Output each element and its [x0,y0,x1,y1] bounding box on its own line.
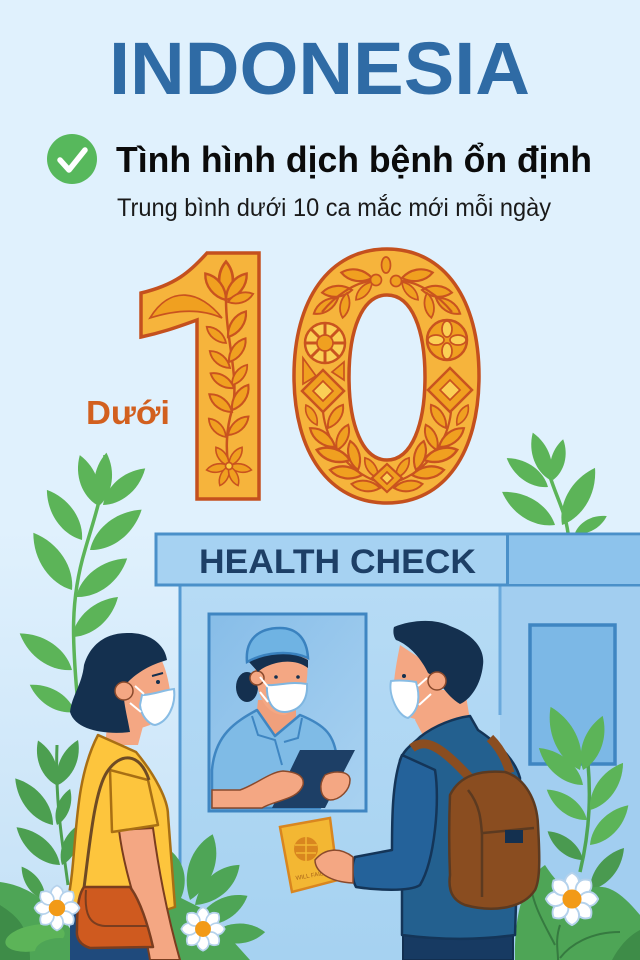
window: nurse [209,614,366,811]
nurse mask [267,683,307,712]
left half of wreath [302,267,382,493]
passport [280,818,338,892]
sign text: HEALTH CHECK [199,543,476,581]
woman [68,633,180,960]
flower: right [546,873,598,925]
man jacket [392,716,520,939]
nurse collar [252,716,302,765]
label: under: Dưới [86,394,170,431]
woman neck [105,700,150,745]
digit 1 with batik pattern [141,253,259,499]
woman sleeve [110,770,158,832]
nurse cap [247,628,308,662]
man mask [390,681,418,718]
left rosette [305,323,345,363]
backpack straps [412,738,510,778]
woman torso [68,735,175,912]
diamonds and triangles [302,358,472,492]
bush: bottom right [515,865,640,960]
nurse right hand [321,772,350,800]
nurse face [255,655,308,715]
plant: top left [14,452,151,719]
nurse hair bun [236,672,258,702]
right half of wreath [392,267,472,493]
plant: bottom left [8,737,85,904]
building [178,585,640,960]
flower: left [35,886,79,930]
man hair [393,621,483,704]
woman arm [119,828,180,960]
top ornament [370,257,402,286]
man hand [315,850,353,883]
woman mask [140,689,174,725]
digit 0 with batik pattern [294,249,479,503]
man legs [403,932,513,960]
nurse shirt [212,710,337,808]
man arm [352,755,437,890]
woman ear [115,682,133,700]
plant: top right [497,430,610,538]
subheading: Trung bình dưới 10 ca mắc mới mỗi ngày [117,193,551,222]
bush: bottom left [0,882,85,960]
woman hair [70,633,167,733]
icon: green check [47,134,97,184]
heading: status: Tình hình dịch bệnh ổn định [116,139,592,180]
right rosette [427,320,467,360]
title: INDONESIA [109,27,530,110]
flower: centre [181,907,225,951]
woman legs [70,900,156,960]
passport: WILL FAIL [295,871,324,882]
woman bag [77,887,153,948]
man neck [415,690,470,745]
nurse neck [256,700,296,745]
nurse left arm [212,771,303,808]
nurse clipboard [272,750,355,808]
woman face [115,657,172,732]
man ear [428,672,446,690]
window: right [530,625,615,764]
woman bag strap [84,758,149,888]
bush: bottom centre [161,830,266,960]
nurse [212,628,355,808]
health check sign [156,534,640,585]
man face [393,645,445,722]
man [315,621,539,960]
backpack [449,772,539,909]
plant: bottom right [533,702,635,896]
